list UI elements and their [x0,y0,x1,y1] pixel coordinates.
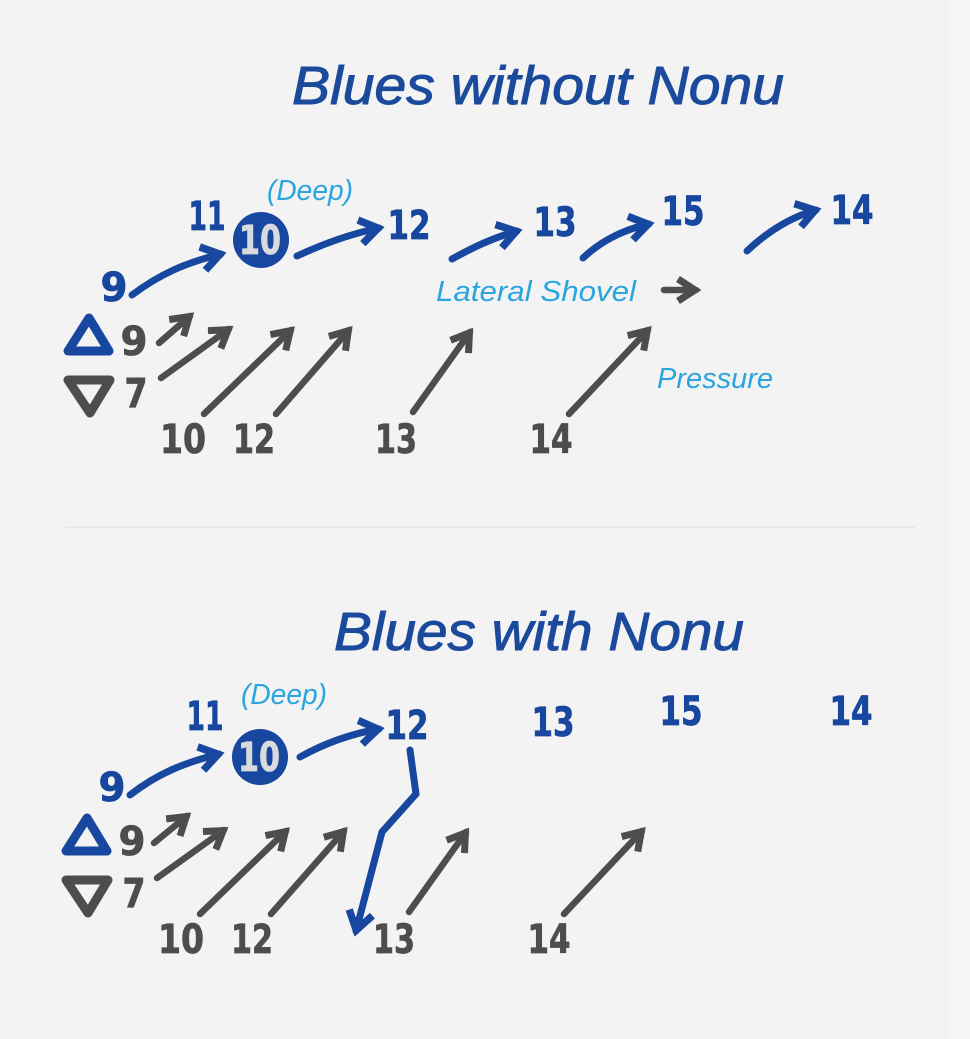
receiver numbers: 14 [830,188,874,234]
grey player numbers: 9 [118,819,146,865]
grey player numbers: 12 [233,417,275,463]
receiver numbers: 15 [662,189,704,235]
diagram: Blues with Nonu [66,679,872,963]
grey player numbers: 10 [160,417,206,463]
grey player numbers: 14 [528,917,570,963]
player circle: 10 [232,729,288,785]
grey player numbers: 10 [158,917,204,963]
grey player numbers: 9 [120,319,148,365]
grey block arrows [154,816,642,914]
grey block arrows [159,316,648,414]
receiver numbers: 12 [388,203,430,249]
receiver numbers: 11 [188,194,226,240]
label: Deep: (Deep) [267,175,353,207]
triangle up [66,818,107,851]
receiver numbers: 9 [100,265,128,311]
receiver numbers: 12 [386,703,428,749]
arrow: shovel direction [664,287,696,293]
receiver numbers [98,689,872,811]
grey player numbers: 7 [122,871,146,917]
blue route arrows [132,210,816,295]
receiver numbers [100,188,874,311]
grey player numbers: 13 [373,917,415,963]
receiver numbers: 13 [532,700,574,746]
label: Lateral Shovel: Lateral Shovel [436,276,638,308]
grey player numbers: 7 [124,371,148,417]
receiver numbers: 11 [186,694,224,740]
grey player numbers: 14 [530,417,572,463]
blue route arrows [130,729,416,931]
player circle: 10: 10 [238,735,280,781]
receiver numbers: 15 [660,689,702,735]
receiver numbers: 14 [830,689,872,735]
triangle up [68,318,109,351]
diagram: Blues without Nonu [68,175,874,463]
label: Pressure: Pressure [657,363,773,395]
title: Blues without Nonu: Blues without Nonu [292,56,784,116]
label: Deep: (Deep) [241,679,327,711]
receiver numbers: 13 [534,200,576,246]
grey player numbers [118,819,570,963]
receiver numbers: 9 [98,765,126,811]
triangle down [66,880,108,913]
title: Blues with Nonu: Blues with Nonu [334,602,744,662]
player circle: 10 [233,212,289,268]
grey player numbers: 13 [375,417,417,463]
grey player numbers: 12 [231,917,273,963]
triangle down [68,380,110,413]
grey player numbers [120,319,572,463]
player circle: 10: 10 [239,218,281,264]
